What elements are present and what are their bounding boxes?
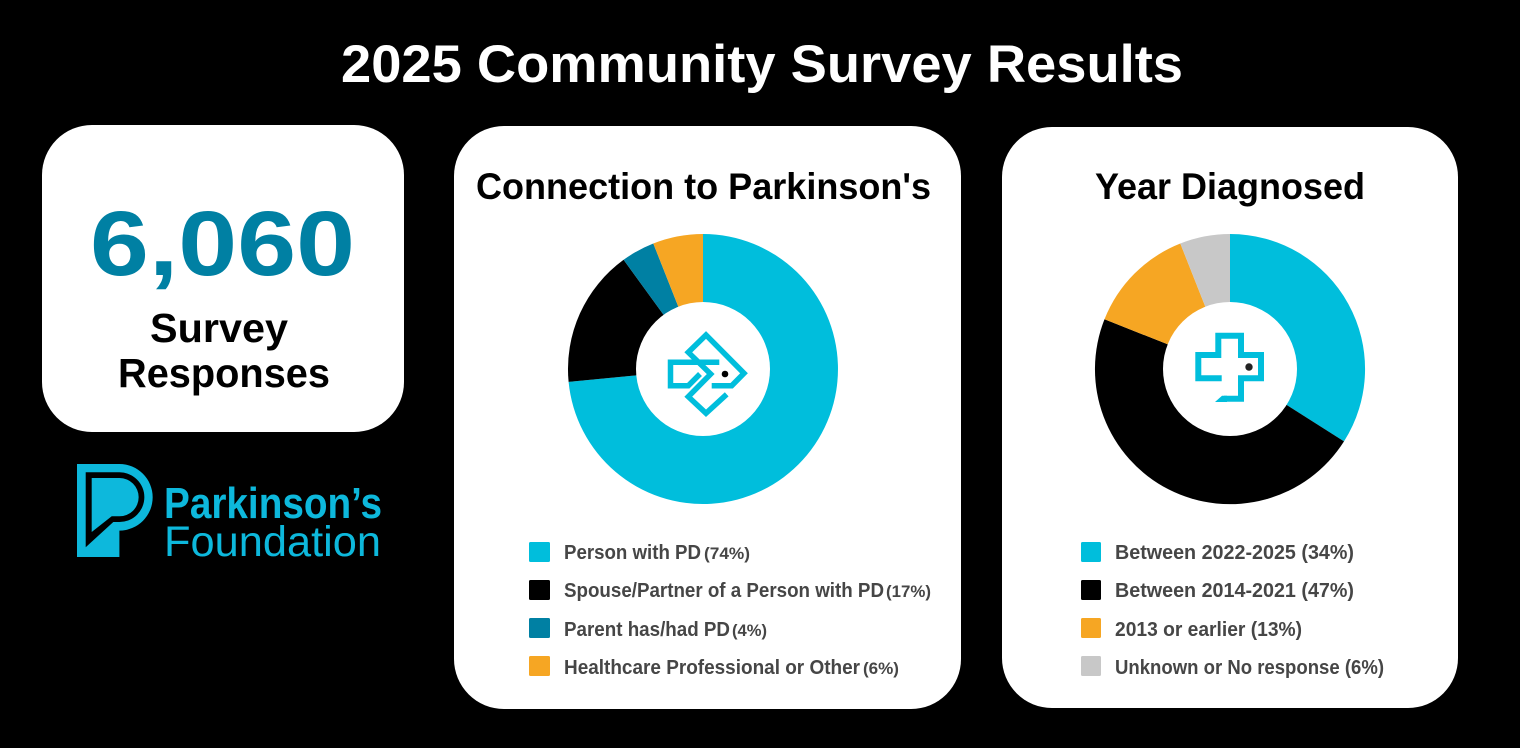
label: survey responses: Survey xyxy=(150,305,288,351)
legend item: 2014-2021: Between 2014-2021 (47%) xyxy=(1115,580,1354,602)
panel: year diagnosed xyxy=(1002,127,1458,708)
legend item: person with PD xyxy=(529,542,750,564)
legend item: parent: (4%) xyxy=(732,621,767,640)
donut chart: connection xyxy=(568,234,838,504)
donut chart: year diagnosed xyxy=(1095,234,1365,504)
title: 2025 Community Survey Results xyxy=(341,35,1183,94)
label: survey responses xyxy=(118,305,330,396)
slice: 2014-2021 xyxy=(1095,319,1344,504)
legend item: 2013 or earlier: 2013 or earlier (13%) xyxy=(1115,619,1302,641)
slice: healthcare professional xyxy=(653,234,703,369)
legend item: healthcare professional: (6%) xyxy=(863,659,899,678)
legend item: person with PD: Person with PD xyxy=(564,542,701,564)
label: survey responses: Responses xyxy=(118,350,330,396)
legend item: spouse or partner: Spouse/Partner of a Person with PD xyxy=(564,580,884,602)
slice: unknown xyxy=(1180,234,1230,369)
legend item: unknown: Unknown or No response (6%) xyxy=(1115,657,1384,679)
legend item: parent: Parent has/had PD xyxy=(564,619,730,641)
legend: connection xyxy=(529,542,931,679)
legend: year diagnosed xyxy=(1081,542,1384,679)
panel: connection to Parkinson's xyxy=(454,126,961,709)
donut hole xyxy=(636,302,770,436)
icon: fish arrows xyxy=(670,335,744,413)
slice: person with PD xyxy=(569,234,838,504)
legend item: person with PD: (74%) xyxy=(704,544,750,563)
legend item: 2022-2025: Between 2022-2025 (34%) xyxy=(1115,542,1354,564)
big number: 6,060 xyxy=(90,193,355,295)
heading: Year Diagnosed xyxy=(1095,166,1365,207)
panel: survey responses xyxy=(42,125,404,432)
logo: Parkinson's Foundation: Foundation xyxy=(164,518,381,566)
legend item: spouse or partner: (17%) xyxy=(886,582,931,601)
slice: 2013 or earlier xyxy=(1104,244,1230,369)
logo mark xyxy=(77,464,153,557)
slice: parent xyxy=(624,244,703,369)
logo text: Parkinson’s xyxy=(164,479,382,528)
slice: 2022-2025 xyxy=(1230,234,1365,441)
donut hole xyxy=(1163,302,1297,436)
icon: medical cross xyxy=(1198,336,1261,402)
legend item: healthcare professional: Healthcare Professional or Other xyxy=(564,657,860,679)
logo: Parkinson's Foundation xyxy=(77,464,382,566)
heading: Connection to Parkinson's xyxy=(476,166,931,207)
slice: spouse or partner xyxy=(568,260,703,382)
